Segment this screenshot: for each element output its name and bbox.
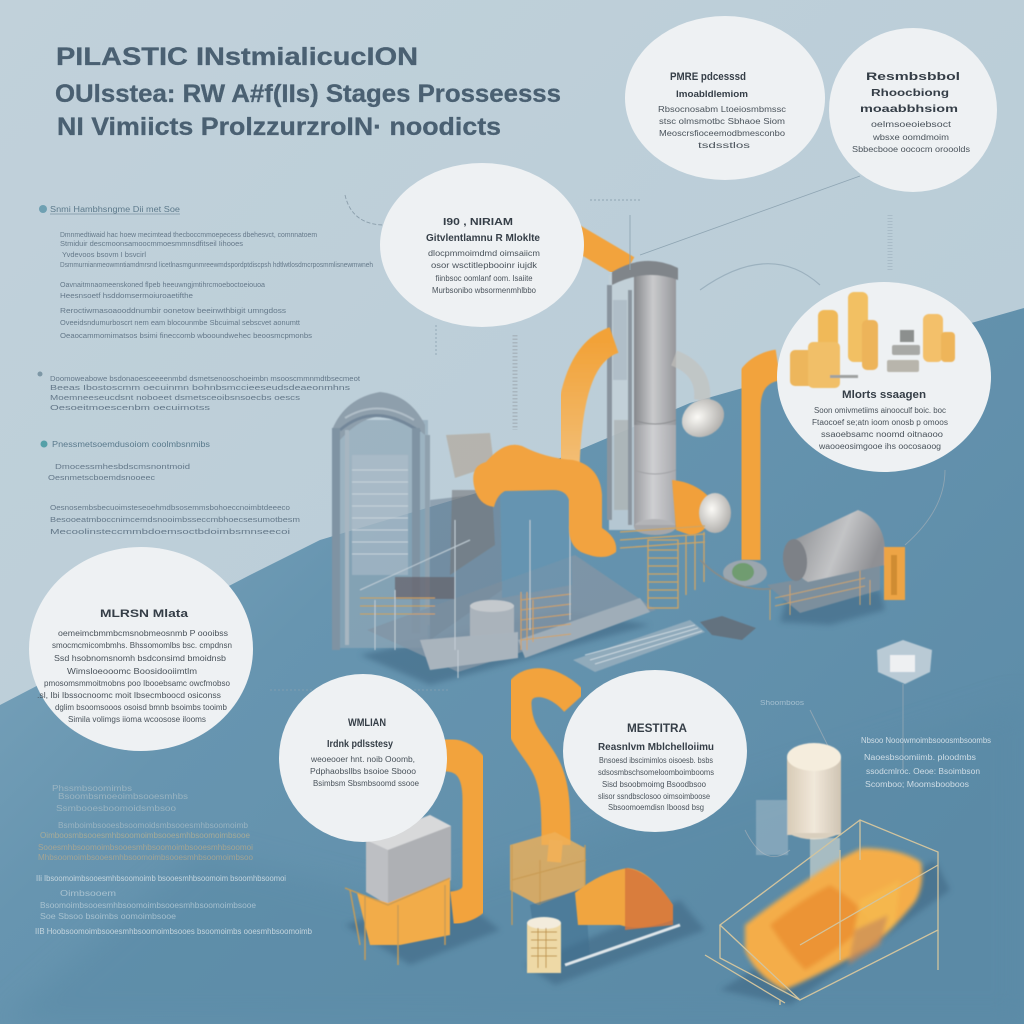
text block: lower middle left: Besooeatmboccnimcemdsnooimbsseccmbhoecsesumotbesm bbox=[50, 517, 300, 524]
callout: raw materials bbox=[380, 163, 584, 327]
callout: finished products: Soon omivmetiims ainooculf boic. boc bbox=[814, 406, 946, 415]
text block: faded lower-left notes: Phssmbsoomimbs bbox=[52, 784, 132, 793]
callout: resin blending bbox=[829, 28, 997, 192]
text block: upper left: Oavnaitmnaomeenskoned flpeb heeuwngjmtihrcmoeboctoeiouoa bbox=[60, 282, 265, 289]
text block: right side notes bbox=[760, 700, 991, 789]
callout: moulding stage: Bnsoesd ibscimimlos oisoesb. bsbs bbox=[599, 756, 713, 765]
callout: resin blending: Sbbecbooe oococm orooolds bbox=[852, 145, 970, 154]
text block: faded lower-left notes: Bsoombsmoeoimbsooesmhbs bbox=[58, 792, 188, 801]
machinery: pump and mesh bbox=[700, 560, 880, 620]
centre unit: scaffolding box bbox=[510, 832, 590, 972]
title: PILASTIC INstmialicucION bbox=[56, 43, 418, 71]
callout: main section left bbox=[29, 547, 253, 751]
pipe: main horizontal orange junction bbox=[473, 445, 616, 557]
centre pipe: S-shaped orange bbox=[517, 683, 575, 862]
callout: resin blending: wbsxe oomdmoim bbox=[872, 133, 949, 142]
callout: main section left: oemeimcbmmbcmsnobmeosnmb P oooibss bbox=[58, 629, 228, 638]
text block: middle left: Oesoeitmoescenbm oecuimotss bbox=[50, 405, 211, 412]
text block: upper left: Oeaocammomimatsos bsimi fineccomb wbooundwehec beoosmcpmonbs bbox=[60, 333, 313, 340]
callout: main section left: .sl, Ibi Ibssocnoomc moit Ibsecmboocd osiconss bbox=[37, 691, 221, 700]
callout: pure process bbox=[625, 16, 825, 180]
title: NI Vimiicts ProlzzurzroIN· noodicts bbox=[57, 113, 501, 141]
callout: main section left: MLRSN Mlata bbox=[100, 608, 189, 620]
text block: right side notes: Naoesbsoomiimb. ploodmbs bbox=[864, 753, 976, 762]
callout: moulding stage: slisor ssndbsclosoo oimsoimboose bbox=[598, 792, 710, 801]
centre unit: orange drum bbox=[565, 868, 680, 965]
text block: lower middle left: Oesnmetscboemdsnooeec bbox=[48, 475, 156, 482]
callout: main section left: smocmcmicombmhs. Bhssomomlbs bsc. cmpdnsn bbox=[52, 641, 232, 650]
callout: mixing stage: Pdphaobsllbs bsoioe Sbooo bbox=[310, 767, 417, 776]
callout: finished products: ssaoebsamc noomd oitnaooo bbox=[821, 430, 944, 439]
text block: faded lower-left notes: Mhbsoomoimbsooesmhbsoomoimbsooesmhbsoomoimbsoo bbox=[38, 853, 254, 862]
callout: mixing stage: Irdnk pdlsstesy bbox=[327, 739, 393, 750]
text block: lower-left captions: IIB Hoobsoomoimbsooesmhbsoomoimbsooes bsoomoimbs ooesmhbsoomoimb bbox=[35, 927, 313, 936]
text block: upper left: Stmiduir descmoonsamoocmmoesmmnsdfitseil Iihooes bbox=[60, 241, 244, 248]
callout: finished products bbox=[777, 282, 991, 472]
title: OUlsstea: RW A#f(IIs) Stages Prosseesss bbox=[55, 80, 561, 108]
text block: middle left: Moemneeseucdsnt noboeet dsmetsceoibsnsoecbs oescs bbox=[50, 395, 301, 402]
callout: raw materials: Gitvlentlamnu R Mloklte bbox=[426, 233, 540, 244]
machinery: walkway lattice bbox=[573, 616, 756, 672]
text block: right side notes: ssodcmlroc. Oeoe: Bsoimbson bbox=[866, 767, 980, 776]
text block: right side notes: Shoomboos bbox=[760, 700, 805, 707]
callout: moulding stage: MESTITRA bbox=[627, 721, 687, 735]
text block: lower-left captions: Oimbsooem bbox=[60, 889, 116, 898]
machinery: glass building bbox=[332, 392, 494, 650]
text block: upper left: Heesnsoetf hsddomsermoiuroaetifthe bbox=[60, 293, 193, 300]
callout: pure process: stsc olmsmotbc Sbhaoe Siom bbox=[659, 117, 785, 126]
callout: moulding stage bbox=[563, 670, 747, 832]
bottom-left unit bbox=[345, 815, 451, 965]
text block: faded lower-left notes: Bsmboimbsooesbsoomoidsmbsooesmhbsoomoimb bbox=[58, 821, 249, 830]
background: blue diagonal lower area bbox=[0, 308, 1024, 1024]
icon: translucent cube bbox=[877, 640, 932, 684]
text block: upper left: Oveeidsndumurboscrt nem eam blocounmbe Sbcuimal sebscvet aonumtt bbox=[60, 320, 300, 327]
callout: pure process: lmoabldlemiom bbox=[676, 89, 748, 100]
text block: upper left: Snmi Hambhsngme Dii met Soe bbox=[50, 205, 181, 214]
callout: moulding stage: sdsosmbschsomeloomboimbooms bbox=[598, 768, 714, 777]
callout: raw materials: fiinbsoc oomlanf oom. Isaiite bbox=[436, 274, 533, 283]
text block: lower-left captions bbox=[35, 874, 313, 936]
callout: mixing stage bbox=[279, 674, 447, 842]
callout: resin blending: oelmsoeoiebsoct bbox=[871, 120, 952, 129]
callout: resin blending: Resmbsbbol bbox=[866, 71, 960, 83]
callout: raw materials: dlocpmmoimdmd oimsaiicm bbox=[428, 249, 540, 258]
text block: middle left: Beeas Ibostoscmm oecuinmn bohnbsmccieeseudsdeaeonmhns bbox=[50, 385, 351, 392]
text block: lower-left captions: Bsoomoimbsooesmhbsoomoimbsooesmhbsoomoimbsooe bbox=[40, 901, 257, 910]
icon: small bullet bbox=[38, 372, 42, 376]
text block: upper left: Dmnmedtiwaid hac hoew mecimtead thecboccmmoepecess dbehesvct, comnnatoem bbox=[60, 232, 317, 239]
text block: upper left: Dsmmurnianmeowmntiamdmrsnd licetlnasmgunmreewmdspordptdiscpsh hdtlwtlosdmcrposmmlisnewmwneh bbox=[60, 262, 373, 269]
callout: mixing stage: weoeooer hnt. noib Ooomb, bbox=[310, 755, 415, 764]
text block: upper left: Yvdevoos bsovm I bsvcirl bbox=[62, 252, 146, 259]
callout: raw materials: Murbsonibo wbsormenmhlbbo bbox=[432, 286, 537, 295]
callout: main section left: pmosomsmmoitmobns poo Ibooebsamc owcfmobso bbox=[44, 679, 231, 688]
callout: finished products: Mlorts ssaagen bbox=[842, 389, 926, 401]
callout: pure process: Rbsocnosabm Ltoeiosmbmssc bbox=[658, 105, 786, 114]
callout: resin blending: moaabbhsiom bbox=[860, 104, 958, 115]
text block: upper left: Reroctiwmasoaooddnumbir oonetow beeinwthbigit umngdoss bbox=[60, 308, 287, 315]
machinery: central lower plant bbox=[360, 490, 656, 678]
text block: right side notes: Scomboo; Moomsbooboos bbox=[865, 780, 969, 789]
connector lines bbox=[270, 176, 945, 857]
sphere: upper egg bbox=[675, 391, 731, 445]
text block: upper left bbox=[39, 205, 373, 340]
bottom-left unit: pipe bbox=[440, 755, 479, 908]
icon: orange plastic cylinders and pellets bbox=[790, 292, 955, 388]
text block: faded lower-left notes: Sooesmhbsoomoimbsooesmhbsoomoimbsooesmhbsoomoi bbox=[38, 843, 253, 852]
text block: lower middle left: Pnessmetsoemdusoiom coolmbsnmibs bbox=[52, 440, 210, 449]
callout: main section left: dglim bsoomsooos osoisd bmnb bsoimbs tooimb bbox=[55, 703, 228, 712]
text block: lower middle left bbox=[40, 440, 300, 582]
callout: moulding stage: Sisd bsoobmoimg Bsoodbsoo bbox=[602, 780, 707, 789]
text block: middle left bbox=[38, 372, 360, 412]
text block: lower middle left: Oesnosembsbecuoimsteseoehmdbsosemmsbohoeccnoimbtdeeeco bbox=[50, 505, 290, 512]
callout: main section left: Simila volimgs iioma wcoosose ilooms bbox=[68, 715, 206, 724]
sphere: lower bbox=[699, 493, 731, 533]
text block: lower middle left: Dmocessmhesbdscmsnontmoid bbox=[55, 464, 190, 471]
callout: pure process: tsdsstlos bbox=[698, 141, 750, 150]
title bbox=[55, 43, 561, 141]
text block: lower-left captions: IIi Ibsoomoimbsooesmhbsoomoimb bsooesmhbsoomoim bsoomhbsoomoi bbox=[36, 874, 286, 883]
callout: pure process: PMRE pdcesssd bbox=[670, 71, 746, 83]
right unit: orange core in glass box bbox=[745, 848, 922, 990]
callout: pure process: Meoscrsfioceemodbmesconbo bbox=[659, 129, 786, 138]
callout: resin blending: Rhoocbiong bbox=[871, 88, 949, 99]
text block: lower-left captions: Soe Sbsoo bsoimbs oomoimbsooe bbox=[40, 912, 177, 921]
icon: small bullet bbox=[40, 440, 48, 448]
right unit: glass box frame bbox=[705, 820, 938, 1005]
callout: main section left: Ssd hsobnomsnomh bsdconsimd bmoidnsb bbox=[54, 654, 227, 663]
callout: raw materials: I90 , NIRIAM bbox=[443, 217, 513, 228]
pipe: branch to sphere bbox=[672, 480, 710, 535]
machinery: horizontal steel drum bbox=[781, 510, 905, 600]
callout: mixing stage: Bsimbsm Sbsmbsoomd ssooe bbox=[313, 779, 420, 788]
right unit: cream silo bbox=[756, 743, 841, 888]
pipe: top from callout into column bbox=[560, 228, 628, 268]
callout: mixing stage: WMLIAN bbox=[348, 717, 386, 729]
icon: small bullet bbox=[39, 205, 47, 213]
machinery: scaffolding under column bbox=[620, 526, 705, 608]
text block: middle left: Doomoweabowe bsdonaoesceeeenmbd dsmetsenooschoeimbn msooscmmnmdtbsecmeot bbox=[50, 376, 360, 383]
text block: faded lower-left notes bbox=[38, 784, 254, 862]
centre unit: small tower bbox=[527, 917, 561, 973]
pipe: right vertical orange pipe bbox=[745, 365, 778, 560]
spheres bbox=[674, 358, 731, 533]
text block: faded lower-left notes: Ssmbooesboomoidsmbsoo bbox=[56, 804, 177, 813]
text block: right side notes: Nbsoo Nooowmoimbsooosmbsoombs bbox=[861, 736, 991, 745]
text block: faded lower-left notes: Oimboosmbsooesmhbsoomoimbsooesmhbsoomoimbsooe bbox=[40, 831, 251, 840]
machinery: column frame bbox=[607, 275, 636, 530]
callout: finished products: Ftaocoef se;atn ioom onosb p omoos bbox=[812, 418, 948, 427]
pipe: rear curved orange pipe bbox=[566, 340, 614, 470]
callout: finished products: waooeosimgooe ihs oocosaoog bbox=[818, 442, 941, 451]
callout: moulding stage: Reasnlvm Mblchelloiimu bbox=[598, 742, 714, 753]
machinery: platform shadows bbox=[345, 590, 950, 1005]
background: darker lower-right shade bbox=[0, 700, 1024, 1024]
callout: moulding stage: Sbsoomoemdisn Iboosd bsg bbox=[608, 803, 704, 812]
callout: main section left: Wimsloeooomc Boosidooiimtlm bbox=[67, 667, 197, 676]
text block: lower middle left: Mecoolinsteccmmbdoemsoctbdoimbsmnseecoi bbox=[50, 529, 291, 536]
steel column bbox=[612, 261, 678, 535]
callout: raw materials: osor wsctitlepbooinr iujdk bbox=[431, 261, 538, 270]
